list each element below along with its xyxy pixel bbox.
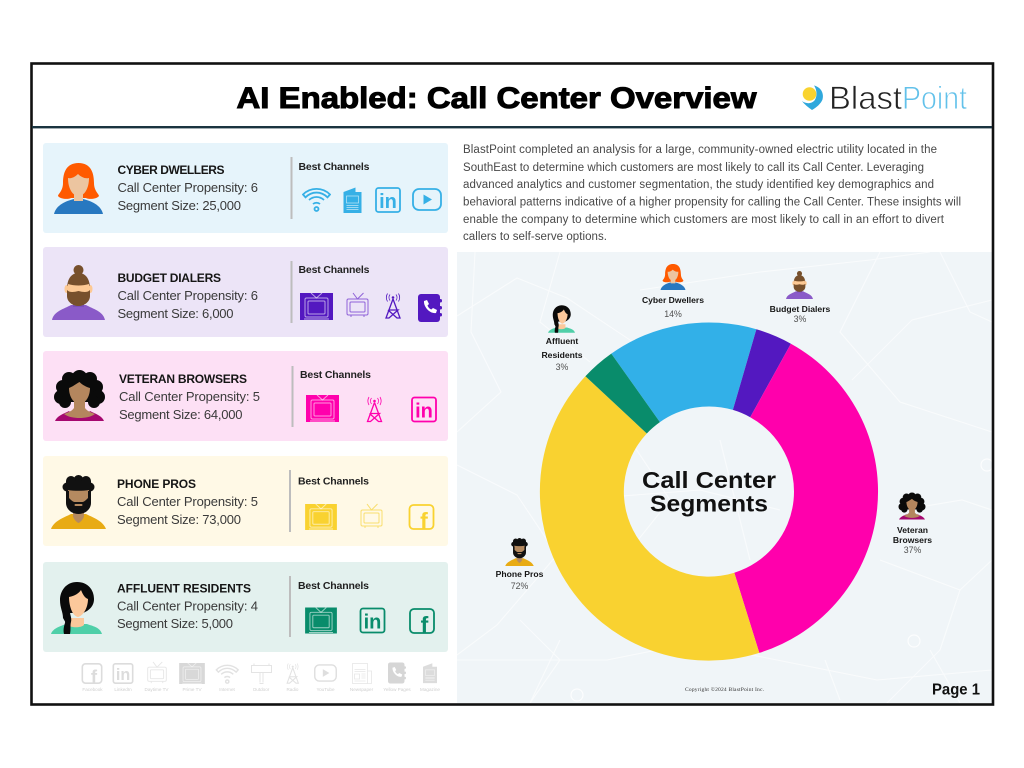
legend: yellow pages: Yellow Pages [383, 687, 411, 692]
donut center label [642, 467, 776, 516]
donut chart: call center segments [540, 323, 878, 661]
icon: youtube [413, 189, 441, 210]
avatar: affluent residents [51, 582, 102, 634]
icon: daytime tv [361, 504, 382, 528]
chart label: phone pros [496, 538, 544, 591]
text: cyber dwellers stats: Call Center Propensity: 6 [118, 180, 258, 195]
text block: intro: BlastPoint completed an analysis for a large, community-owned electric utility located in the [463, 144, 937, 156]
chart label: affluent residents: Residents [541, 350, 583, 360]
icon: prime tv [305, 608, 337, 634]
legend: radio: Radio [286, 687, 299, 692]
text: budget dialers stats [118, 271, 258, 321]
panel: phone pros [43, 456, 448, 546]
panel: budget dialers [43, 247, 448, 337]
icon: linkedin: in [364, 612, 381, 634]
text block: intro: callers to self-serve options. [463, 231, 607, 243]
heading: best channels: Best Channels [298, 476, 369, 488]
legend: prime tv [179, 663, 205, 692]
text: veteran browsers stats: VETERAN BROWSERS [119, 372, 247, 386]
legend: youtube [315, 665, 336, 692]
text: affluent residents stats [117, 582, 258, 631]
legend: daytime tv: Daytime TV [145, 687, 169, 692]
legend: linkedin [113, 664, 133, 692]
logo: BlastPoint: Point [902, 80, 967, 116]
chart label: affluent residents: 3% [556, 362, 569, 372]
text block: intro: enable the company to determine which customers are most likely to call in an effort to divert [463, 214, 945, 226]
avatar: cyber dwellers [54, 163, 103, 214]
text: budget dialers stats: Segment Size: 6,000 [118, 306, 234, 321]
legend: facebook [82, 664, 103, 692]
panel: affluent residents [43, 562, 448, 652]
text: veteran browsers stats: Call Center Propensity: 5 [119, 389, 260, 404]
chart label: budget dialers: Budget Dialers [770, 304, 831, 314]
text block: intro: behavioral patterns indicative of a higher propensity for calling the Call Center. These insights will [463, 196, 961, 208]
text: phone pros stats: PHONE PROS [117, 477, 196, 491]
avatar: budget dialers [52, 265, 105, 320]
icon: linkedin [375, 187, 401, 213]
text: cyber dwellers stats [118, 163, 258, 213]
icon: magazine [344, 188, 362, 213]
legend: magazine: Magazine [420, 687, 440, 692]
page number: Page 1 [932, 682, 980, 698]
legend: channel icons [82, 662, 440, 692]
text: budget dialers stats: BUDGET DIALERS [118, 271, 221, 285]
legend: newspaper [350, 664, 374, 692]
chart label: affluent residents [541, 305, 583, 372]
legend: outdoor [252, 664, 272, 692]
text: veteran browsers stats [119, 372, 260, 422]
header divider [32, 126, 992, 128]
icon: linkedin [360, 608, 386, 634]
legend: facebook: f [91, 666, 98, 687]
legend: newspaper: Newspaper [350, 687, 374, 692]
legend: prime tv: Prime TV [182, 687, 202, 692]
icon: linkedin: in [415, 400, 433, 422]
legend: internet [216, 665, 238, 692]
legend: internet: Internet [219, 687, 236, 692]
icon: internet [303, 189, 330, 211]
heading: best channels: Best Channels [298, 580, 369, 592]
text: phone pros stats: Call Center Propensity: 5 [117, 494, 258, 509]
chart label: phone pros: Phone Pros [496, 569, 544, 579]
chart label: budget dialers [770, 271, 831, 324]
donut center label: Call Center [642, 467, 776, 493]
logo: BlastPoint [802, 80, 967, 116]
icon: prime tv [300, 293, 333, 320]
chart label: cyber dwellers [642, 264, 704, 319]
legend: magazine [420, 663, 440, 692]
icon: linkedin [411, 396, 437, 422]
icon: radio [368, 397, 382, 422]
chart label: veteran browsers: Browsers [893, 535, 932, 545]
text block: intro [463, 144, 961, 243]
panel: map background [457, 252, 993, 710]
heading: best channels: Best Channels [298, 161, 370, 173]
avatar: veteran browsers [54, 370, 105, 421]
text: phone pros stats [117, 477, 258, 527]
chart label: phone pros: 72% [511, 581, 528, 591]
title: AI Enabled: Call Center Overview [236, 82, 757, 115]
text: affluent residents stats: Call Center Propensity: 4 [117, 598, 258, 614]
segment: phone pros [540, 376, 759, 661]
heading: best channels: Best Channels [300, 369, 371, 381]
legend: radio [286, 663, 299, 692]
text: phone pros stats: Segment Size: 73,000 [117, 512, 241, 527]
icon: linkedin: in [379, 191, 397, 213]
icon: facebook [408, 504, 434, 534]
chart label: cyber dwellers: 14% [664, 309, 682, 319]
copyright: Copyright ©2024 BlastPoint Inc. [685, 686, 765, 693]
icon: radio [386, 294, 400, 318]
legend: linkedin: LinkedIn [114, 687, 132, 692]
avatar: phone pros [51, 475, 106, 529]
legend: facebook: Facebook [82, 687, 103, 692]
segment: budget dialers [733, 329, 791, 417]
segment: veteran browsers [734, 344, 878, 653]
frame [32, 64, 993, 704]
chart label: cyber dwellers: Cyber Dwellers [642, 295, 704, 305]
text block: intro: SouthEast to determine which customers are most likely to call its Call Center. Leveraging [463, 162, 924, 174]
panel: cyber dwellers [43, 143, 448, 233]
chart label: veteran browsers: Veteran [897, 525, 928, 535]
segment: affluent residents [585, 354, 660, 434]
icon: facebook [409, 608, 435, 638]
text: affluent residents stats: Segment Size: 5,000 [117, 616, 233, 631]
chart label: veteran browsers: 37% [904, 545, 921, 555]
legend: outdoor: Outdoor [253, 687, 270, 692]
text: affluent residents stats: AFFLUENT RESIDENTS [117, 582, 251, 596]
icon: daytime tv [347, 293, 368, 317]
icon: facebook: f [420, 508, 428, 534]
legend: daytime tv [145, 662, 169, 692]
text: budget dialers stats: Call Center Propensity: 6 [118, 288, 258, 303]
icon: facebook: f [421, 612, 429, 638]
logo: BlastPoint: Blast [829, 80, 902, 116]
legend: youtube: YouTube [316, 687, 335, 692]
text: veteran browsers stats: Segment Size: 64,000 [119, 407, 242, 422]
heading: best channels: Best Channels [298, 264, 370, 276]
chart label: veteran browsers [893, 492, 932, 555]
legend: yellow pages [383, 662, 411, 692]
chart label: budget dialers: 3% [794, 314, 807, 324]
text: cyber dwellers stats: Segment Size: 25,000 [118, 198, 241, 213]
icon: prime tv [306, 395, 339, 422]
panel: veteran browsers [43, 351, 448, 441]
donut center label: Segments [650, 490, 768, 516]
icon: prime tv [305, 504, 337, 530]
legend: linkedin: in [116, 666, 130, 684]
segment: cyber dwellers [611, 323, 756, 422]
chart label: affluent residents: Affluent [546, 336, 578, 346]
icon: yellow pages [418, 294, 442, 322]
text block: intro: advanced analytics and customer segmentation, the study identified key demographics and [463, 179, 934, 191]
text: cyber dwellers stats: CYBER DWELLERS [118, 163, 224, 177]
